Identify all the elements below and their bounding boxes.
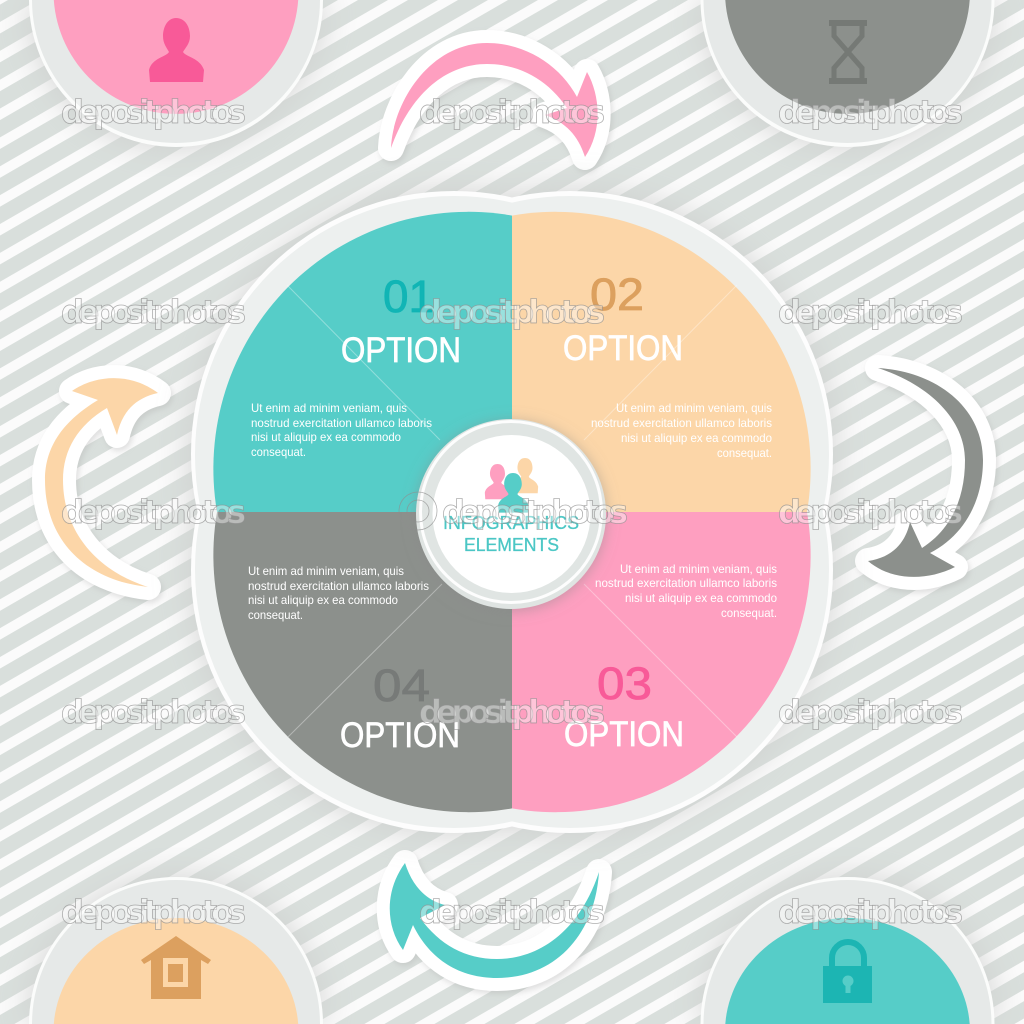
watermark overlay: depositphotos [61,293,246,331]
panel 04: grey: consequat. [248,608,303,622]
centre disc: INFOGRAPHICS [443,513,579,533]
watermark overlay: depositphotos [419,893,605,931]
watermark overlay: depositphotos [61,893,246,931]
watermark overlay: depositphotos [419,293,605,331]
panel 03: pink: nisi ut aliquip ex ea commodo [625,591,777,605]
panel 03: pink: 03 [597,658,652,709]
watermark overlay: depositphotos [61,93,246,131]
watermark overlay: depositphotos [419,93,605,131]
panel 02: peach: Ut enim ad minim veniam, quis [616,401,772,415]
panel 04: grey: 04 [373,660,430,711]
panel 01: teal: 01 [383,271,434,322]
panel 04: grey: OPTION [340,716,460,755]
corner badge: house [29,877,323,1024]
watermark overlay: depositphotos [778,493,963,531]
watermark overlay [61,93,963,931]
panel 02: peach: 02 [590,269,644,320]
centre disc [416,419,606,609]
arrow: right grey [868,368,983,577]
panel 03: pink: nostrud exercitation ullamco laboris [595,576,777,590]
corner badge: lock [700,877,994,1024]
watermark overlay: depositphotos [442,493,628,531]
watermark overlay: depositphotos [778,293,963,331]
panel 03: pink: consequat. [721,606,777,620]
watermark overlay: depositphotos [61,693,246,731]
arrow: top pink [391,43,598,157]
panel 02: peach: OPTION [563,329,683,368]
panel 04: grey: Ut enim ad minim veniam, quis [248,564,404,578]
panel 02: peach: nostrud exercitation ullamco laboris [591,416,772,430]
watermark overlay: depositphotos [419,693,605,731]
corner badge: hourglass [700,0,994,147]
panel 02: peach: consequat. [717,446,772,460]
watermark overlay: depositphotos [778,93,963,131]
panel 01: teal: OPTION [341,331,461,370]
panel 03: pink: Ut enim ad minim veniam, quis [620,562,777,576]
arrow: left peach [45,378,158,587]
panel 01: teal: consequat. [251,445,306,459]
main four-lobed frame [191,191,833,833]
watermark overlay: depositphotos [61,493,246,531]
centre disc: ELEMENTS [464,535,559,555]
panel 01: teal: nostrud exercitation ullamco laboris [251,416,432,430]
arrow: bottom teal [390,863,599,978]
panel 02: peach [512,212,811,512]
corner badge: person [29,0,323,147]
panel 03: pink: OPTION [564,715,684,754]
panel 03: pink [512,512,811,812]
panel 01: teal: nisi ut aliquip ex ea commodo [251,430,401,444]
panel 04: grey: nisi ut aliquip ex ea commodo [248,593,398,607]
panel 04: grey: nostrud exercitation ullamco laboris [248,579,429,593]
watermark overlay: depositphotos [778,693,963,731]
watermark overlay: depositphotos [778,893,963,931]
panel 04: grey [213,512,512,812]
panel 01: teal [213,212,512,512]
panel 02: peach: nisi ut aliquip ex ea commodo [621,431,772,445]
panel 01: teal: Ut enim ad minim veniam, quis [251,401,407,415]
